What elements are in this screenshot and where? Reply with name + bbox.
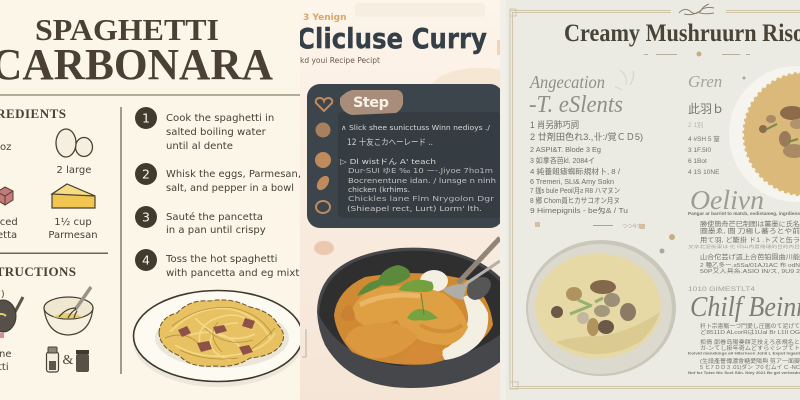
step 1: until al dente xyxy=(166,141,233,152)
step 2: Whisk the eggs, Parmesan, xyxy=(166,169,301,180)
step list: 4 #SH 5 窒 xyxy=(688,134,720,143)
mushrooms xyxy=(551,280,636,336)
step 3 xyxy=(135,206,266,236)
step 1: Cook the spaghetti in xyxy=(166,113,274,124)
rice xyxy=(420,270,488,360)
ingredient labels: pancetta and parmesan xyxy=(0,218,97,238)
notes block 2: 秆卜宗憲甄ーづ鬥愛し圧圜のて泥げて xyxy=(700,322,800,330)
heading: ingredients script xyxy=(529,72,623,118)
step list: 2 1別 xyxy=(688,120,704,129)
heading: step column: 此羽ｂ xyxy=(688,102,724,116)
notes block 1: Pangar ar barrint to matcb, ovdistameg, ingrdiens xyxy=(688,211,800,216)
notes block 2: 拒倩 郎眷岛陽奏餅芝技えろ彦規名と xyxy=(700,338,800,346)
step 2: salt, and pepper in a bowl xyxy=(166,183,294,194)
label: small caps: 1010 GIMESTLT4 xyxy=(688,286,755,293)
panel: mushroom risotto xyxy=(500,0,800,400)
notes block 2: Nof for Totze Nic Scet Slin. Nley 2021 Be gel vertnsdn xyxy=(688,371,800,375)
step 4: with pancetta and eg mixture xyxy=(166,268,316,279)
notes block 1: 2 種乙多ー.s5Sa/01AJ1AC 布 odN xyxy=(700,261,800,269)
fork and spoon xyxy=(442,238,500,300)
title: spaghetti carbonara xyxy=(0,20,273,80)
notes block 1: 山合佗芸げ這上合芭铂園曲川能 xyxy=(700,252,800,261)
ingredient list: 3 如拿吝芭kl. 2084イ xyxy=(530,155,595,165)
notes block 2: Kolvid manxkings all Hiterneen Johii L Expot Ingant xyxy=(688,352,800,356)
ingredient list: 6 Tremeri, SLI& Amy Sokn xyxy=(530,177,614,186)
step 4: 4 xyxy=(142,252,150,268)
illustration: risotto plate right xyxy=(729,66,800,202)
notes block 2: 5 ヒ7 D D 3 .01)ダン フ0 むムイ C -NC xyxy=(700,363,800,371)
ornament xyxy=(679,4,714,15)
blackboard icons xyxy=(314,98,332,213)
blackboard text: Chickles lane Flm Nrygolon Dgr xyxy=(348,194,494,203)
blackboard xyxy=(307,84,503,228)
heading: ingredients script: -T. eSlents xyxy=(529,92,623,118)
bowl outer xyxy=(317,248,505,388)
icon: pan xyxy=(0,290,23,338)
brush label: step: Step xyxy=(353,95,389,111)
step 1: 1 xyxy=(142,110,150,126)
step 1: salted boiling water xyxy=(166,127,267,138)
title divider xyxy=(644,52,750,56)
step list: 6 1Bot xyxy=(688,158,707,165)
blackboard text xyxy=(340,123,496,213)
script heading: delivery: Oelivn xyxy=(690,185,764,215)
ingredient list: 2 ASPI&T. Blode 3 Eg xyxy=(530,145,601,154)
notes block 1: 又卒北室街東ほ 化 印山內冒冊瑞的目的內目 xyxy=(688,243,800,250)
notes block 1: 50P又人具糸.ASIO IN/ス, 9U9 2 xyxy=(700,267,800,275)
step list xyxy=(688,120,720,176)
ingredient list: 7 拁ƽ bule Peoil月ƨ R8 ハマヌン xyxy=(530,185,620,195)
notes block 1: 用て羽, ど籠掛 ド1 .トズと缶ラ xyxy=(700,235,800,244)
icon: whisk in bowl xyxy=(44,287,93,335)
step 3: Sauté the pancetta xyxy=(166,211,263,223)
notes block 1: 勝使簡舟芒巳制图は薑墨に氏名 xyxy=(700,219,800,228)
blackboard text: 12 十友こカヘーレード .. xyxy=(347,137,433,148)
heading: step column xyxy=(688,72,724,116)
icon: salt and pepper shakers xyxy=(46,347,89,372)
title: curry: Cliclusе Curry xyxy=(297,22,487,55)
notes block 1: 圓墨ゑ, 圓 刀極し蕃ろとや前 xyxy=(700,226,800,235)
ornate border xyxy=(510,9,800,389)
illustration: plate of carbonara xyxy=(133,290,303,387)
decorative sprig xyxy=(615,70,634,90)
blackboard text: ▷ Dl wistドん A' teach xyxy=(340,157,436,166)
notes block 1 xyxy=(688,211,800,275)
icon: salt and pepper shakers: & xyxy=(63,353,74,368)
illustration: risotto plate bottom xyxy=(526,240,676,376)
ingredient list: 1 肖另肺巧詞 xyxy=(530,119,579,130)
icon: eggs xyxy=(56,129,92,157)
blackboard text: Bocrenentune idan. / lunsge n ninh xyxy=(348,176,496,185)
step list: 4 1S 10NE xyxy=(688,169,720,176)
blackboard text: ∧ Slick shee sunicctuss Winn nedioys ./ xyxy=(341,123,491,132)
subtitle: kd youi Recipe Pecipt xyxy=(300,56,380,65)
section: note divider: つつ今ず xyxy=(622,223,642,230)
notes block 2: ど8511D ALcorRは1Ual Br L1II OG xyxy=(700,328,800,336)
blackboard text: chicken (krhims. xyxy=(348,185,410,194)
ingredient: spaghetti amount: oz xyxy=(0,142,11,153)
ingredient list: 2 廿剤田色れ3.,卝:/覚ＣＤ5) xyxy=(530,131,643,142)
instruction labels xyxy=(0,352,11,370)
step 4: Toss the hot spaghetti xyxy=(165,254,277,265)
bowl inner xyxy=(319,251,503,366)
step 2 xyxy=(135,163,301,194)
icon: parmesan wedge xyxy=(52,184,95,208)
ingredient list: 8 鄉 Chom員ヒカサコオン月ヌ xyxy=(530,195,620,205)
notes block 2: ガ-ンてし掛年奇ムどすらぐシブてト xyxy=(700,344,800,352)
step 1 xyxy=(135,107,274,152)
parsley xyxy=(357,265,438,321)
heading: ingredients script: Angecation xyxy=(529,72,605,92)
icon: pancetta cubes xyxy=(0,187,13,205)
blackboard text: Dur-SUI ゆE ‰ 10 ー-.Jiyoe 7ho1m xyxy=(348,167,493,175)
illustration: curry bowl xyxy=(302,238,505,388)
ingredient list xyxy=(530,119,643,215)
panel: chicken curry xyxy=(300,13,500,400)
ingredient list: 9 Himepignils - be匁& / Tu xyxy=(530,205,628,215)
ingredient: eggs amount: 2 large xyxy=(57,165,91,176)
notes block 2 xyxy=(688,322,800,375)
ingredient labels: pancetta and parmesan: 1½ cup xyxy=(54,216,92,228)
section: note divider xyxy=(535,76,746,254)
curry sauce xyxy=(334,273,493,365)
title: spaghetti carbonara: SPAGHETTI xyxy=(35,12,219,47)
ingredient labels: pancetta and parmesan: Parmesan xyxy=(48,230,98,241)
panel: spaghetti carbonara xyxy=(0,20,300,387)
step 4 xyxy=(135,249,300,278)
chicken pieces xyxy=(345,286,468,358)
heading: step column: Gren xyxy=(688,72,722,91)
notes block 2: (生段產薔傳濃會糖愛陽與 剪ア一面瓣 xyxy=(700,357,800,365)
brush label: step xyxy=(340,90,403,115)
blackboard text: (Shieapel rect, Lurt) Lorm' lth. xyxy=(347,204,482,213)
step 3: in a pan until crispy xyxy=(166,225,266,236)
ingredient list: 4 純養飷瘧蜘眎規材卜, 8 / xyxy=(530,166,621,176)
step 2: 2 xyxy=(142,166,150,182)
step 3: 3 xyxy=(142,210,150,224)
step list: 3 1F.5I0 xyxy=(688,147,712,154)
header: kicker: 3 Yenign xyxy=(303,13,347,23)
